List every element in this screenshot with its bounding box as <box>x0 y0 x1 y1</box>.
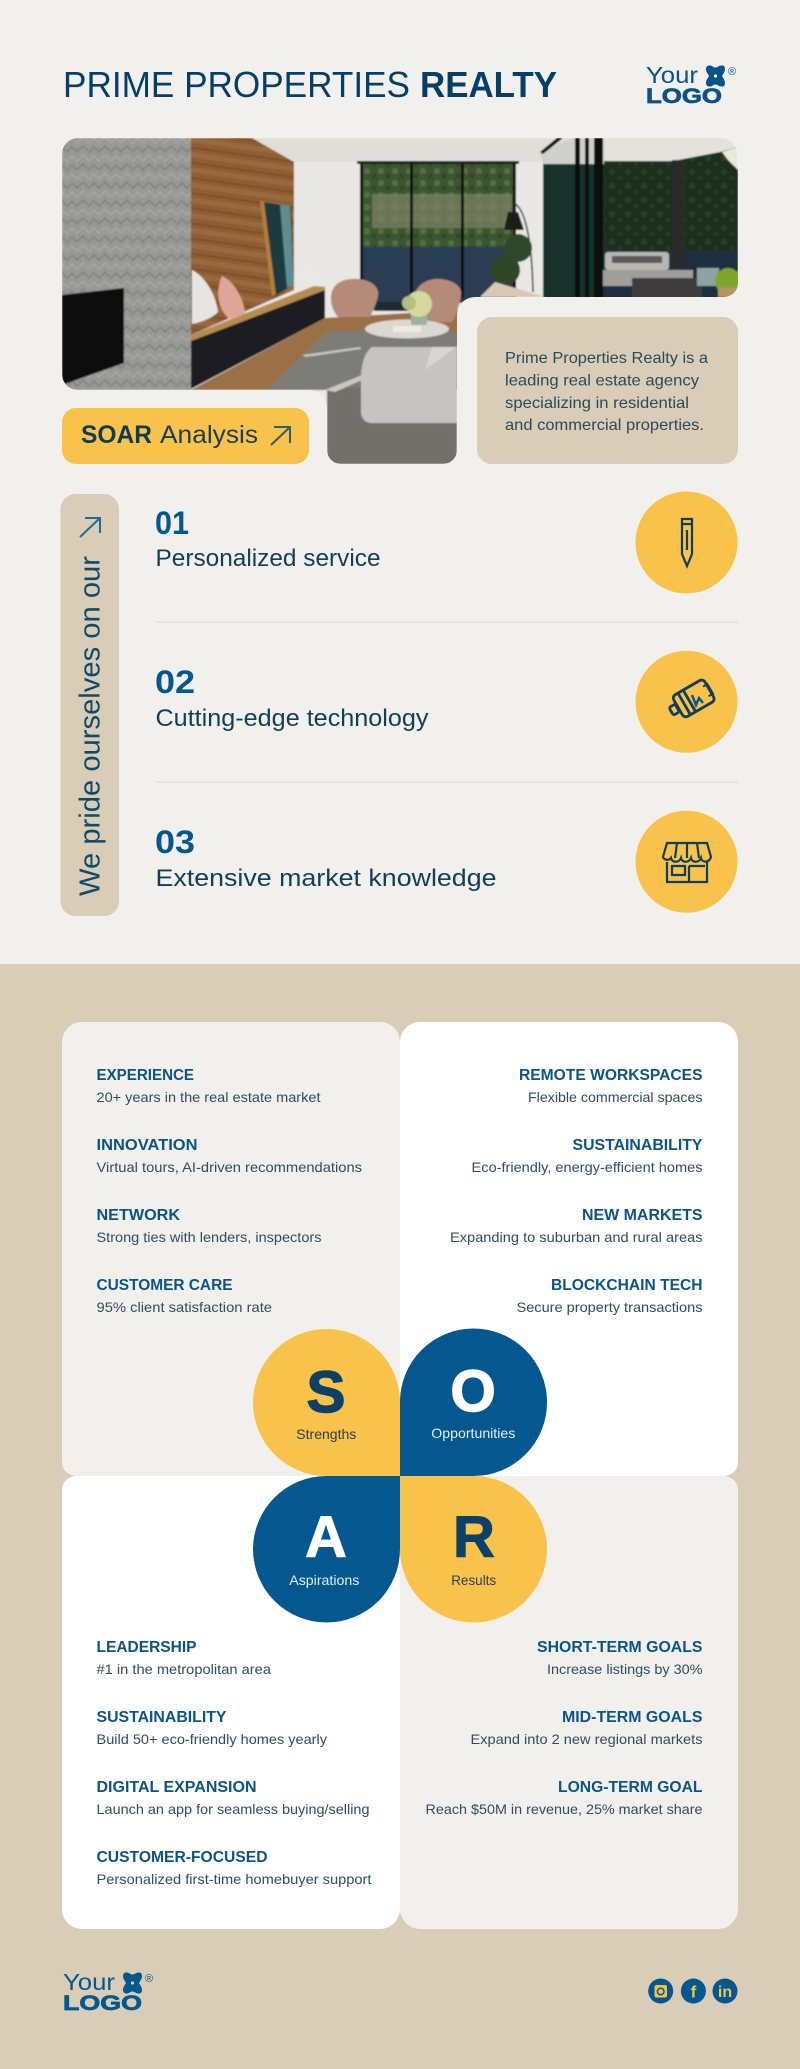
feature 03: Extensive market knowledge <box>156 865 496 892</box>
page background top <box>0 0 800 964</box>
photo: modern living room <box>62 138 741 464</box>
panel: results <box>400 1476 738 1929</box>
panel: opportunities: Eco-friendly, energy-efficient homes <box>472 1159 702 1175</box>
panel: results: Increase listings by 30% <box>547 1661 702 1677</box>
panel: strengths: 20+ years in the real estate market <box>96 1089 321 1105</box>
photo ceiling <box>254 138 568 162</box>
photo ottoman <box>361 346 457 423</box>
petal: results: R <box>453 1505 495 1570</box>
panel: results: Reach $50M in revenue, 25% market share <box>426 1801 703 1817</box>
vertical label pill <box>60 494 119 916</box>
panel: results: MID-TERM GOALS <box>562 1709 703 1726</box>
photo windows <box>357 161 519 303</box>
logo: footer <box>63 1969 153 2015</box>
panel: aspirations: #1 in the metropolitan area <box>96 1661 271 1677</box>
panel: strengths <box>62 1022 400 1476</box>
feature 03: 03 <box>155 824 195 860</box>
info card: and commercial properties. <box>505 417 704 434</box>
photo coffee table and flowers <box>365 291 449 338</box>
icon: linkedin: in <box>718 1984 732 2001</box>
panel: strengths: EXPERIENCE <box>96 1067 194 1084</box>
panel: aspirations: Launch an app for seamless buying/selling <box>96 1801 370 1817</box>
petal: strengths: S <box>307 1360 345 1425</box>
panel: aspirations: Personalized first-time homebuyer support <box>96 1871 372 1887</box>
petal: opportunities: O <box>450 1359 496 1424</box>
panel: strengths: INNOVATION <box>96 1137 198 1154</box>
icon: storefront <box>636 811 738 913</box>
petal: strengths: Strengths <box>296 1426 356 1442</box>
vertical label pill: We pride ourselves on our <box>74 556 106 896</box>
icon: linkedin <box>712 1978 738 2004</box>
feature 02: Cutting-edge technology <box>156 705 428 732</box>
feature 01: 01 <box>155 505 189 541</box>
photo bench <box>191 286 325 389</box>
photo fireplace <box>62 288 124 385</box>
info card: Prime Properties Realty is a <box>505 350 708 367</box>
panel: aspirations: DIGITAL EXPANSION <box>96 1779 256 1796</box>
info card: specializing in residential <box>505 395 689 412</box>
panel: strengths: Virtual tours, AI-driven recommendations <box>96 1159 362 1175</box>
logo: header <box>646 62 736 108</box>
panel: opportunities: Expanding to suburban and rural areas <box>450 1229 702 1245</box>
photo floor and rug <box>191 310 460 464</box>
panel: opportunities: BLOCKCHAIN TECH <box>551 1277 702 1294</box>
info card <box>477 317 738 464</box>
icon: instagram <box>648 1978 673 2004</box>
petal: aspirations: A <box>305 1505 347 1570</box>
petal: aspirations: Aspirations <box>289 1572 359 1588</box>
petal: aspirations <box>253 1476 400 1622</box>
panel: opportunities: Secure property transactions <box>516 1299 702 1315</box>
photo lamp and plant <box>480 203 545 297</box>
logo: footer: Your <box>63 1969 115 1995</box>
panel: aspirations: CUSTOMER-FOCUSED <box>96 1849 268 1866</box>
panel: opportunities: SUSTAINABILITY <box>572 1137 703 1154</box>
photo backdrop wall <box>192 162 544 452</box>
feature 02: 02 <box>155 664 195 700</box>
panel: strengths: Strong ties with lenders, inspectors <box>96 1229 322 1245</box>
logo: header: ® <box>728 66 736 78</box>
button: SOAR Analysis <box>62 408 309 464</box>
feature 02 <box>155 664 428 732</box>
icon: battery device <box>636 651 738 753</box>
photo stone wall <box>62 138 191 390</box>
title: PRIME PROPERTIES <box>63 64 410 105</box>
logo: footer: LOGO <box>63 1992 142 2015</box>
logo: footer: ® <box>145 1973 153 1985</box>
feature 01 <box>155 505 380 572</box>
panel: opportunities: Flexible commercial spaces <box>528 1089 702 1105</box>
title: REALTY <box>420 64 557 105</box>
panel: aspirations: LEADERSHIP <box>96 1639 197 1656</box>
petal: results <box>400 1476 547 1622</box>
panel: opportunities <box>400 1022 738 1476</box>
button: SOAR Analysis: Analysis <box>160 421 258 449</box>
panel: opportunities: NEW MARKETS <box>582 1207 703 1224</box>
photo outdoor patio <box>540 138 741 301</box>
petal: results: Results <box>451 1572 496 1588</box>
panel: opportunities: REMOTE WORKSPACES <box>519 1067 703 1084</box>
page background bottom <box>0 964 800 2069</box>
logo: header: Your <box>646 62 698 88</box>
info card: leading real estate agency <box>505 372 699 390</box>
panel: aspirations: SUSTAINABILITY <box>96 1709 227 1726</box>
panel: strengths: CUSTOMER CARE <box>96 1277 233 1294</box>
petal: strengths <box>253 1329 400 1476</box>
panel: strengths: NETWORK <box>96 1207 180 1224</box>
feature 03 <box>155 824 496 892</box>
icon: facebook: f <box>691 1982 697 2002</box>
logo: header: LOGO <box>646 85 722 108</box>
panel: aspirations: Build 50+ eco-friendly homes yearly <box>96 1731 327 1747</box>
petal: opportunities: Opportunities <box>431 1425 515 1441</box>
panel: aspirations <box>62 1476 400 1929</box>
panel: results: LONG-TERM GOAL <box>558 1779 703 1796</box>
photo cushions <box>190 269 246 325</box>
button: SOAR Analysis: SOAR <box>81 421 152 449</box>
icon: pencil <box>636 492 738 594</box>
feature 01: Personalized service <box>156 545 380 572</box>
panel: results: SHORT-TERM GOALS <box>537 1639 703 1656</box>
photo lounge chairs <box>331 279 461 322</box>
photo wood panel <box>191 138 294 335</box>
photo leaning art <box>260 201 294 296</box>
panel: strengths: 95% client satisfaction rate <box>96 1299 272 1315</box>
icon: facebook <box>681 1978 706 2004</box>
panel: results: Expand into 2 new regional markets <box>470 1731 702 1747</box>
petal: opportunities <box>400 1328 547 1476</box>
